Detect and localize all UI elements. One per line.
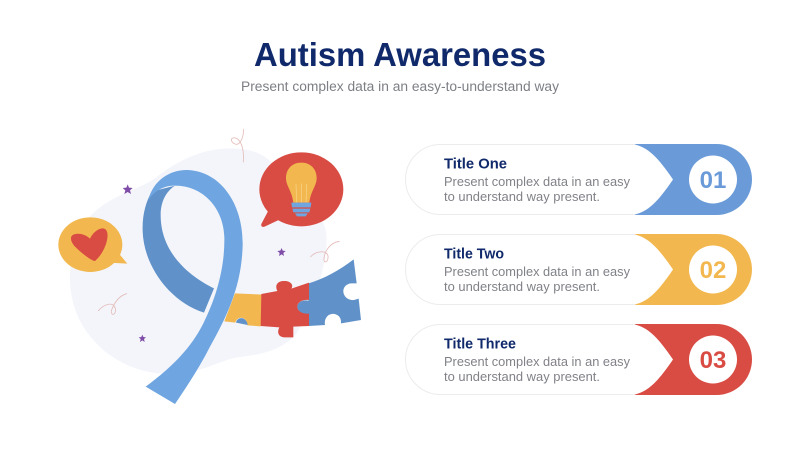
ribbon back strand: [143, 186, 214, 313]
icon: bulb: [286, 163, 317, 203]
card three: 03: [700, 347, 726, 374]
icon: bulb base: [291, 203, 311, 216]
card three badge: [630, 324, 752, 395]
speech bubble: heart: [58, 217, 127, 272]
card one title: Title One: [444, 156, 507, 172]
speech bubble: lightbulb: [259, 152, 343, 227]
subtitle: Present complex data in an easy-to-understand way: [241, 79, 559, 94]
card one: to understand way present.: [444, 190, 600, 204]
title: Autism Awareness: [254, 36, 546, 73]
card one: 01: [700, 167, 726, 194]
card three number: [689, 336, 737, 384]
puzzle piece: blue: [297, 259, 361, 326]
illustration: autism awareness ribbon: [58, 129, 361, 404]
card two body: [406, 234, 673, 304]
card two title: Title Two: [444, 246, 504, 262]
ribbon front strand: [146, 170, 243, 404]
icon: heart: [71, 228, 108, 261]
card one: [406, 144, 752, 215]
card three body: [406, 324, 673, 394]
decorative squiggles: [98, 129, 339, 314]
card one badge: [630, 144, 752, 215]
puzzle piece: yellow: [224, 293, 264, 326]
card two badge: [630, 234, 752, 305]
card two: to understand way present.: [444, 280, 600, 294]
stars: [123, 184, 286, 342]
background blob: [70, 148, 327, 374]
card two number: [689, 246, 737, 294]
card one number: [689, 156, 737, 204]
card two: 02: [700, 257, 726, 284]
card three text: Present complex data in an easy: [444, 355, 631, 369]
puzzle piece: red: [261, 281, 309, 337]
card three title: Title Three: [444, 336, 516, 352]
card two: [406, 234, 752, 305]
card three: [406, 324, 752, 395]
card two text: Present complex data in an easy: [444, 265, 631, 279]
card one text: Present complex data in an easy: [444, 175, 631, 189]
card three: to understand way present.: [444, 370, 600, 384]
icon: bulb filaments: [296, 183, 307, 203]
card one body: [406, 144, 673, 214]
